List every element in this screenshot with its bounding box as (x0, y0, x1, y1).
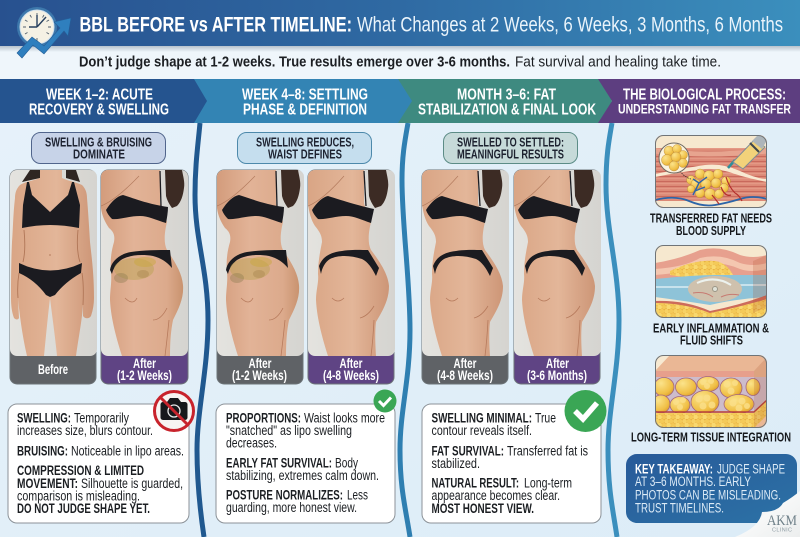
text panel: week 4-8 notes: POSTURE NORMALIZES: (226, 487, 343, 502)
text panel: month 3-6 notes: contour reveals itself. (432, 423, 532, 438)
pill: swelling and bruising dominate: DOMINATE (73, 146, 125, 162)
text panel: week 1-2 notes: BRUISING: (17, 444, 68, 459)
icon: no camera (154, 391, 194, 431)
panel backgrounds dividers (195, 123, 208, 537)
illustration: inflammation and fluid (655, 245, 767, 318)
photo card: after 1-2 weeks, column two (217, 170, 304, 384)
chevron: biological process (590, 79, 800, 123)
photo card: before, front view: Before (38, 362, 68, 377)
text panel: week 4-8 notes: Body (335, 455, 358, 470)
pill: swelling and bruising dominate: SWELLING & BRUISING (45, 134, 152, 150)
pill: swelling reduces: WAIST DEFINES (268, 146, 342, 162)
header banner (0, 0, 800, 46)
photo card: before, front view (10, 170, 97, 384)
chevron: month 3-6: STABILIZATION & FINAL LOOK (418, 102, 597, 119)
caption: transferred fat: BLOOD SUPPLY (676, 224, 746, 238)
text panel: month 3-6 notes (422, 404, 601, 523)
subtitle: Fat survival and healing take time. (515, 54, 721, 70)
text panel: month 3-6 notes: Long-term (524, 475, 572, 490)
callout: key takeaway: KEY TAKEAWAY: (635, 461, 713, 476)
text panel: week 1-2 notes: Noticeable in lipo areas. (71, 444, 184, 459)
text panel: week 1-2 notes: comparison is misleading. (17, 489, 140, 504)
title: BBL BEFORE vs AFTER TIMELINE: (80, 12, 352, 36)
pill: swelling reduces (238, 132, 372, 164)
logo: page curl with AKM clinic (735, 491, 800, 537)
callout: key takeaway (626, 454, 797, 523)
photo card: after 1-2 weeks, column one: After (133, 356, 157, 371)
photo card: after 1-2 weeks, column two: After (248, 356, 272, 371)
chevron: week 1-2: WEEK 1–2: ACUTE (46, 86, 153, 104)
chevron: month 3-6 (395, 79, 612, 123)
photo card: after 4-8 weeks, column two: (4-8 Weeks) (323, 368, 379, 383)
icon: large check badge (564, 390, 606, 432)
pill: swelled to settled: SWELLED TO SETTLED: (457, 134, 564, 150)
text panel: week 4-8 notes: EARLY FAT SURVIVAL: (226, 455, 332, 470)
text panel: month 3-6 notes: MOST HONEST VIEW. (432, 501, 534, 516)
title (80, 12, 783, 36)
photo card: after 1-2 weeks, column one (101, 170, 188, 384)
chevron: week 4-8: WEEK 4–8: SETTLING (242, 86, 368, 104)
text panel: month 3-6 notes: FAT SURVIVAL: (432, 444, 504, 459)
text panel: week 4-8 notes: "snatched" as lipo swelling (226, 423, 352, 438)
text panel: week 1-2 notes (8, 404, 189, 523)
photo card: after 3-6 months, column three: After (546, 356, 570, 371)
icon: small check badge (374, 390, 396, 412)
text panel: week 1-2 notes: SWELLING: (17, 411, 71, 426)
photo card: after 4-8 weeks, column three: After (454, 356, 477, 371)
text panel: month 3-6 notes: True (535, 411, 556, 426)
text panel: week 4-8 notes: stabilizing, extremes calm down. (226, 468, 379, 483)
photo card: after 4-8 weeks, column two: After (340, 356, 363, 371)
text panel: month 3-6 notes: Transferred fat is (507, 444, 588, 459)
photo card: after 4-8 weeks, column two (308, 170, 395, 384)
caption: inflammation: FLUID SHIFTS (680, 333, 743, 347)
photo card: after 1-2 weeks, column one: (1-2 Weeks) (117, 368, 172, 383)
caption: inflammation (653, 322, 769, 347)
caption: transferred fat (650, 212, 772, 238)
chevron: week 4-8 (190, 79, 412, 123)
text panel: month 3-6 notes: appearance becomes clear. (432, 488, 560, 503)
subtitle: Don’t judge shape at 1-2 weeks. True results emerge over 3-6 months. (79, 54, 510, 70)
illustration: long-term tissue integration (652, 355, 767, 428)
pill: swelling reduces: SWELLING REDUCES, (256, 134, 354, 150)
chevron: week 4-8: PHASE & DEFINITION (243, 102, 367, 119)
text panel: month 3-6 notes: stabilized. (432, 456, 480, 471)
photo card: after 4-8 weeks, column three: (4-8 Weeks) (437, 368, 493, 383)
pill: swelled to settled: MEANINGFUL RESULTS (457, 146, 564, 162)
text panel: week 1-2 notes: increases size, blurs contour. (17, 423, 153, 438)
text panel: week 1-2 notes: DO NOT JUDGE SHAPE YET. (17, 501, 150, 516)
text panel: week 1-2 notes: Silhouette is guarded, (81, 476, 183, 491)
logo: page curl with AKM clinic: CLINIC (772, 528, 792, 534)
icon: clock with rising arrow (17, 7, 71, 58)
photo card: after 3-6 months, column three: (3-6 Months) (527, 368, 587, 383)
text panel: week 4-8 notes: Less (347, 487, 368, 502)
photo card: after 4-8 weeks, column three (422, 170, 509, 384)
chevron: month 3-6: MONTH 3–6: FAT (457, 86, 556, 104)
callout: key takeaway: AT 3–6 MONTHS. EARLY (635, 474, 751, 489)
illustration: transferred fat and blood supply (655, 134, 767, 208)
text panel: month 3-6 notes: NATURAL RESULT: (432, 475, 519, 490)
photo card: after 3-6 months, column three (514, 170, 601, 384)
chevron: week 1-2: RECOVERY & SWELLING (29, 102, 169, 119)
text panel: week 4-8 notes: guarding, more honest view. (226, 500, 357, 515)
text panel: month 3-6 notes: SWELLING MINIMAL: (432, 411, 532, 426)
text panel: week 4-8 notes (216, 404, 395, 523)
pill: swelled to settled (444, 132, 578, 164)
text panel: week 1-2 notes: MOVEMENT: (17, 476, 78, 491)
pill: swelling and bruising dominate (32, 132, 166, 164)
text panel: week 4-8 notes: decreases. (226, 436, 277, 450)
text panel: week 1-2 notes: COMPRESSION & LIMITED (17, 463, 144, 478)
text panel: week 4-8 notes: PROPORTIONS: (226, 411, 301, 426)
photo card: after 1-2 weeks, column two: (1-2 Weeks) (232, 368, 287, 383)
callout: key takeaway: TRUST TIMELINES. (635, 500, 724, 515)
chevron: week 1-2 (0, 79, 207, 123)
text panel: week 1-2 notes: Temporarily (74, 411, 129, 426)
text panel: week 4-8 notes: Waist looks more (304, 411, 385, 426)
